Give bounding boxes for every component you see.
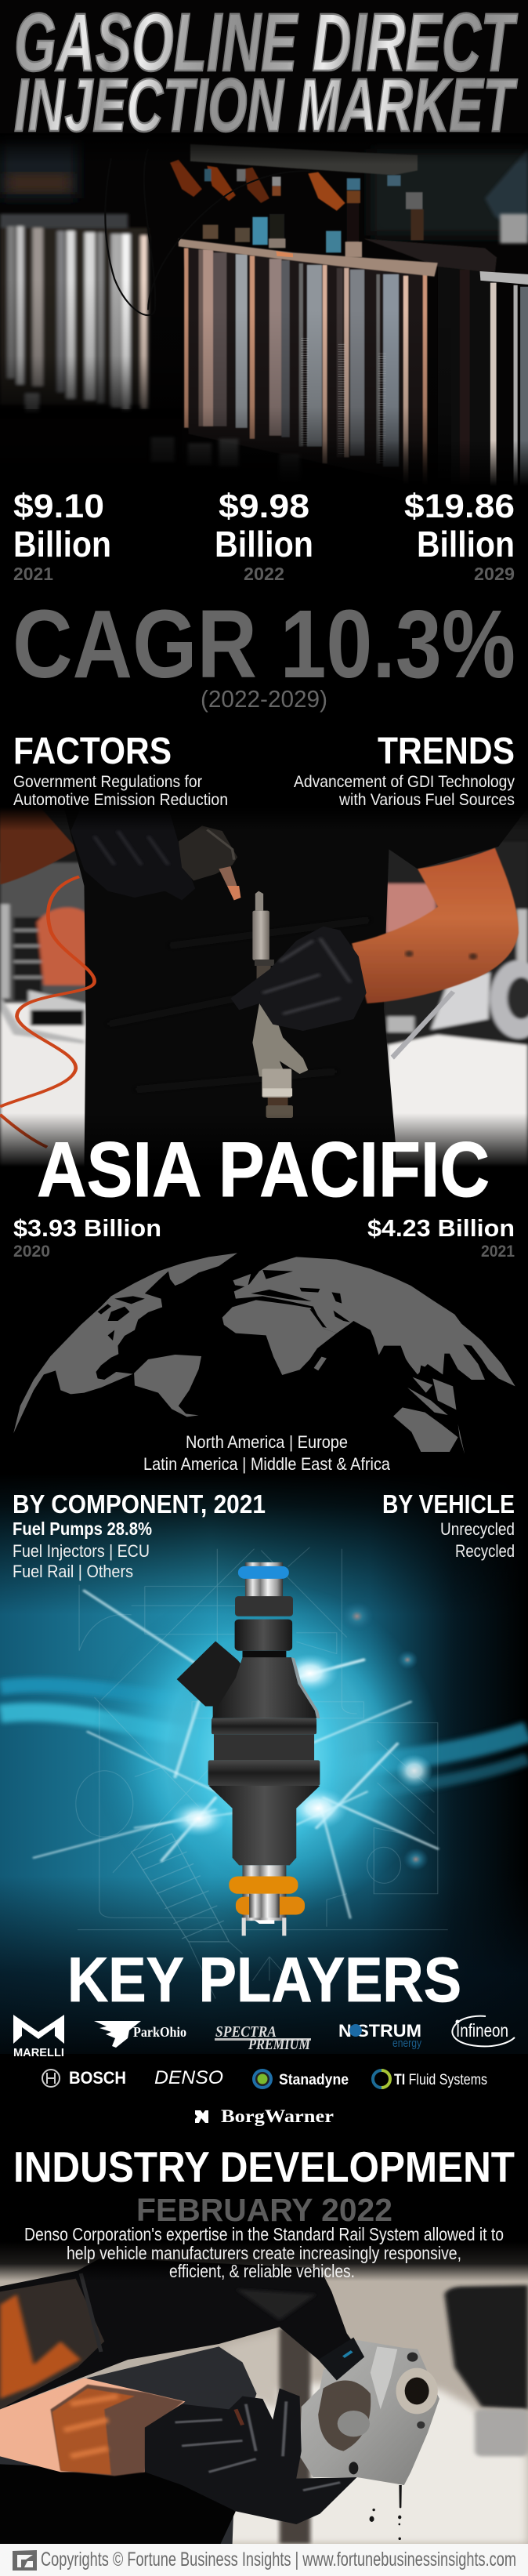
logo: TI Fluid Systems [373,2070,487,2088]
Asia Pacific market values [13,1214,515,1261]
value: 2020 [13,1214,161,1261]
black t-shirt [64,807,528,1168]
by vehicle [382,1489,515,1561]
value: 2021: 2021 [481,1243,515,1261]
Madagascar [314,1357,327,1370]
skin arm, upper left [0,807,78,884]
trends: Advancement of GDI Technology [294,773,515,791]
factors: Automotive Emission Reduction [13,791,228,809]
forearm with skin and sleeve [0,2378,185,2472]
South-east Asian islands [407,1388,448,1415]
flowing light bands [0,1685,528,1801]
Africa [222,1300,337,1375]
value: 2021 [367,1214,515,1261]
black cables [105,149,309,315]
orange air hose [0,876,95,1147]
logo: ParkOhio: ParkOhio [133,2024,186,2040]
footer [0,2544,528,2576]
company logos [13,2015,515,2126]
factors [13,731,228,809]
panel: bottom photo of hand holding oily engine part [0,2248,528,2544]
Australia [393,1407,458,1452]
logo: Nostrum Energy: N STRUM [338,2021,421,2041]
stat: 2029 [404,488,515,584]
icon: Fortune Business Insights logo [13,2550,37,2571]
logo: Marelli: MARELLI [13,2046,64,2059]
panel: header photo of injector test bench [0,143,528,484]
panel: segmentation background with blueprint and energy glow [0,1483,528,2054]
stat: 2029: 2029 [474,564,515,584]
injector rail beam [190,144,418,175]
stat: 2022 [215,488,313,584]
stat: 2022: $9.98 [219,488,309,525]
top gloved hand and tool [71,807,240,900]
logo: Spectra Premium [215,2023,311,2053]
middle gauge bank [183,238,497,486]
trends: TRENDS [378,731,515,772]
Eurasia [234,1257,515,1386]
stat: 2022: Billion [215,524,313,564]
industry development description: efficient, & reliable vehicles. [169,2261,355,2281]
stat: 2022: 2022 [244,564,284,584]
logo: BorgWarner: BorgWarner [221,2106,334,2126]
stat: 2029: $19.86 [404,488,515,525]
by component [13,1489,266,1581]
factors: Government Regulations for [13,773,202,791]
trends [294,731,515,809]
blurred light floor [219,2383,528,2544]
industry development description: help vehicle manufacturers create increasingly responsive, [67,2243,461,2263]
blurred post [280,2328,310,2544]
world map globe [13,1253,515,1453]
logo: Marelli [13,2015,64,2059]
logo: Spectra Premium: PREMIUM [248,2036,311,2053]
energy burst behind injector [91,1582,441,1917]
stat: 2029: Billion [417,524,515,564]
factors: FACTORS [13,731,172,772]
value: 2021: $4.23 Billion [367,1214,515,1242]
right gauge bank [480,271,528,285]
South America [134,1355,201,1417]
logo: Bosch: BOSCH [69,2068,126,2088]
industry development description [24,2225,504,2281]
logo: TI Fluid Systems: TI Fluid Systems [394,2072,487,2088]
oil drips [370,2485,402,2540]
left blurred gauge bank [0,214,148,412]
blurred dark vehicle, right [444,2285,528,2409]
other regions list [143,1432,391,1474]
logo: Bosch [42,2068,126,2088]
fuel injector [252,891,308,1118]
right forearm [352,848,519,1003]
segmentation text [13,1489,515,2073]
logo: Infineon [452,2016,515,2046]
logo: Stanadyne [252,2069,349,2089]
inland seas cut-outs [98,1270,435,1378]
panel: mechanic holding fuel injector photo [0,809,528,1165]
logo: Stanadyne: Stanadyne [279,2072,349,2088]
value: 2020: $3.93 Billion [13,1214,161,1242]
other regions list: Latin America | Middle East & Africa [143,1454,391,1474]
stat: 2021: Billion [13,524,111,564]
light flares [170,1801,227,1837]
market size figures [13,488,515,584]
engine part [300,2340,439,2485]
glove wrist and injector neck [318,2338,364,2381]
logo: ParkOhio [94,2021,186,2048]
value: 2020: 2020 [13,1243,50,1261]
bank top rail [179,238,438,277]
factors and trends [13,731,515,809]
blueprint line drawing [76,1547,448,1999]
by component: Fuel Rail | Others [13,1562,133,1581]
trends: with Various Fuel Sources [338,791,515,809]
lower gloved hand [230,927,367,1031]
heading: industry development [13,2144,515,2226]
title [14,0,519,141]
stat: 2021: 2021 [13,564,53,584]
upper sleeve and gloved arm [0,2258,363,2409]
injectors and orange connectors [170,160,424,257]
logo: Spectra Premium: SPECTRA [215,2023,277,2041]
by vehicle: Unrecycled [440,1519,515,1539]
floor fittings [151,437,300,482]
background car, left [0,862,91,1166]
background car, right [384,841,528,1166]
by component: Fuel Pumps 28.8% [13,1518,152,1539]
grey cushion behind forearm [0,2346,257,2544]
CAGR figure: (2022-2029) [201,685,327,713]
logo: Nostrum Energy: energy [392,2037,421,2050]
logo: Denso: DENSO [154,2067,223,2088]
by vehicle: Recycled [455,1541,515,1561]
North America and Greenland [13,1253,237,1433]
gauge scale ticks [305,338,382,465]
icon: fuel injector illustration [177,1562,320,1936]
by component: Fuel Injectors | ECU [13,1541,150,1561]
stat: 2021 [13,488,111,584]
logo: Nostrum Energy [338,2021,421,2050]
British Isles [233,1274,251,1287]
stat: 2021: $9.10 [13,488,104,525]
logo: Infineon: Infineon [456,2020,508,2041]
other regions list: North America | Europe [186,1432,348,1452]
oily glove [145,2389,357,2524]
by component: BY COMPONENT, 2021 [13,1489,266,1518]
